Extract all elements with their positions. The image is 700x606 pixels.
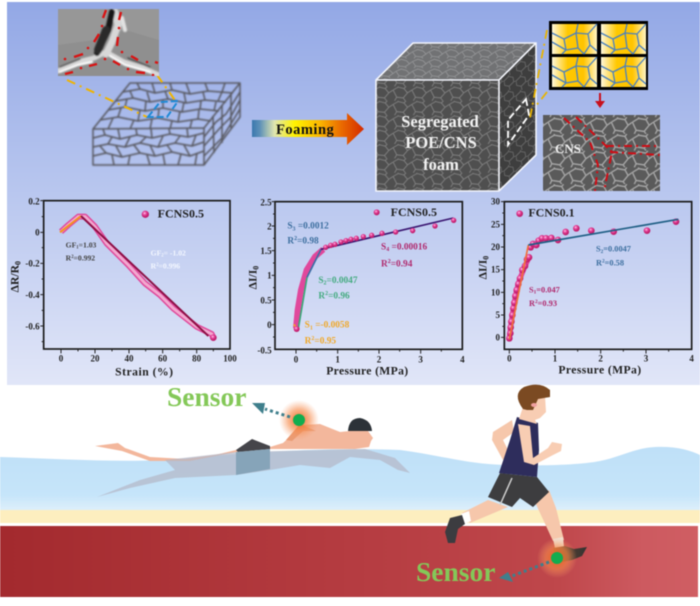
chart: current vs pressure FCNS0.1: R	[529, 299, 535, 308]
SEM micrograph: foam cell junction	[58, 9, 159, 76]
cube label: Segregated	[401, 112, 479, 131]
chart: current vs pressure FCNS0.1: 2	[535, 299, 538, 305]
lower sensor glow	[537, 538, 577, 578]
chart: current vs pressure FCNS0.5: 3	[418, 354, 423, 364]
chart: current vs pressure FCNS0.1: 15	[491, 265, 501, 275]
chart: resistance vs strain: FCNS0.5	[158, 207, 204, 221]
shorts	[488, 473, 549, 507]
hair	[518, 385, 550, 410]
cube label	[401, 112, 479, 174]
chart: current vs pressure FCNS0.5: =-0.0058	[313, 321, 350, 331]
chart: resistance vs strain: -0.2	[25, 259, 40, 269]
chart: resistance vs strain: 40	[125, 353, 134, 363]
upper sensor arrow	[252, 403, 290, 417]
back sock	[461, 511, 471, 524]
chart: current vs pressure FCNS0.1: R	[596, 258, 602, 267]
chart: resistance vs strain: 80	[192, 353, 202, 363]
chart: current vs pressure FCNS0.5: 4	[460, 354, 465, 364]
swimmer arm	[286, 424, 316, 441]
chart: current vs pressure FCNS0.1: S	[596, 245, 601, 254]
chart: current vs pressure FCNS0.5: Pressure (MPa)	[326, 365, 408, 378]
chart: current vs pressure FCNS0.1: =0.047	[536, 285, 560, 294]
lower sensor label: Sensor	[416, 556, 495, 587]
chart: current vs pressure FCNS0.5: =0.00016	[389, 242, 428, 252]
schematic: four segregated-network panels	[549, 21, 648, 90]
neck and face	[519, 396, 546, 424]
runner figure	[445, 385, 587, 563]
foaming arrow: Foaming	[276, 122, 335, 138]
white dashed selection on cube	[508, 99, 529, 145]
chart: current vs pressure FCNS0.1: 4	[689, 354, 694, 364]
chart: current vs pressure FCNS0.1: 1	[534, 290, 537, 296]
chart: resistance vs strain: =0.996	[159, 262, 180, 271]
chart: current vs pressure FCNS0.5: ΔI/I	[246, 270, 259, 289]
chart: resistance vs strain: GF	[66, 240, 76, 249]
chart: resistance vs strain: -0.4	[25, 290, 40, 300]
chart: current vs pressure FCNS0.5: =0.0047	[327, 276, 358, 286]
chart: current vs pressure FCNS0.1: 0	[495, 332, 500, 342]
chart: current vs pressure FCNS0.5: 2	[267, 221, 272, 231]
chart: current vs pressure FCNS0.5: 0	[251, 266, 260, 270]
chart: resistance vs strain: 0.2	[28, 196, 40, 206]
chart: current vs pressure FCNS0.5: S	[381, 242, 386, 252]
front leg	[534, 490, 564, 541]
chart: resistance vs strain	[8, 196, 237, 378]
front shoe	[553, 546, 587, 563]
swimmer cap	[348, 418, 372, 431]
chart: current vs pressure FCNS0.5: 4	[386, 247, 389, 253]
chart: current vs pressure FCNS0.1: 0	[507, 354, 512, 364]
singlet	[499, 417, 539, 477]
chart: current vs pressure FCNS0.5: 1	[267, 271, 272, 281]
chart: current vs pressure FCNS0.5: 2	[377, 354, 382, 364]
chart: current vs pressure FCNS0.5: 2	[311, 336, 314, 342]
chart: current vs pressure FCNS0.5: R	[318, 291, 325, 301]
chart: current vs pressure FCNS0.5: 2.5	[260, 197, 272, 207]
foam block illustration	[93, 83, 240, 165]
front arm	[518, 424, 562, 465]
chart: current vs pressure FCNS0.1: 5	[495, 310, 500, 320]
chart: current vs pressure FCNS0.5: S	[318, 276, 324, 286]
chart: current vs pressure FCNS0.1: 0	[481, 256, 490, 260]
chart: current vs pressure FCNS0.5: S	[287, 222, 293, 232]
chart: current vs pressure FCNS0.1: =0.0047	[603, 245, 631, 254]
upper sensor glow	[279, 400, 319, 440]
chart: current vs pressure FCNS0.1: 25	[491, 219, 501, 229]
chart: current vs pressure FCNS0.5: S	[305, 321, 310, 331]
cheek	[531, 403, 537, 407]
chart: current vs pressure FCNS0.1: 3	[644, 354, 649, 364]
red down arrow	[595, 93, 605, 108]
chart: resistance vs strain: Strain (%)	[115, 365, 174, 378]
CNS label: CNS	[555, 141, 581, 156]
chart: resistance vs strain: 20	[91, 353, 100, 363]
chart: resistance vs strain: 0	[13, 261, 22, 265]
chart: current vs pressure FCNS0.1: 1	[553, 354, 558, 364]
chart: resistance vs strain: 2	[156, 263, 159, 268]
chart: current vs pressure FCNS0.5: 2	[388, 259, 391, 265]
chart: resistance vs strain: = -1.02	[164, 249, 186, 258]
yellow dashed zoom lines from foam to micrograph	[67, 75, 177, 117]
chart: current vs pressure FCNS0.5: 0.5	[260, 295, 272, 305]
blue dashed selection on foam	[148, 101, 178, 117]
chart: current vs pressure FCNS0.5: 1	[335, 354, 340, 364]
yellow dashed lines to schematic	[530, 30, 547, 118]
chart: current vs pressure FCNS0.5: 1	[310, 325, 313, 331]
chart: resistance vs strain: 2	[71, 255, 74, 260]
chart: current vs pressure FCNS0.5: =0.98	[297, 236, 319, 246]
chart: current vs pressure FCNS0.1: Pressure (MPa)	[558, 363, 642, 376]
upper sensor label: Sensor	[167, 381, 246, 412]
back arm	[492, 420, 514, 460]
chart: current vs pressure FCNS0.5: R	[305, 336, 311, 346]
chart: current vs pressure FCNS0.1: =0.93	[538, 299, 557, 308]
chart: current vs pressure FCNS0.1: 2	[598, 354, 603, 364]
upper sensor dot	[293, 414, 305, 426]
chart: current vs pressure FCNS0.5: =0.94	[391, 259, 413, 269]
chart: current vs pressure FCNS0.5: 0	[294, 354, 299, 364]
chart: current vs pressure FCNS0.1: FCNS0.1	[528, 206, 575, 220]
chart: resistance vs strain: -0.6	[25, 321, 40, 331]
chart: resistance vs strain: 0	[35, 228, 40, 238]
chart: current vs pressure FCNS0.5: 1.5	[260, 246, 272, 256]
segregated foam cube	[376, 43, 536, 191]
chart: resistance vs strain: 0	[59, 353, 64, 363]
back shoe	[445, 515, 465, 543]
chart: current vs pressure FCNS0.1: ΔI/I	[476, 260, 489, 279]
swimmer figure	[95, 418, 410, 497]
chart: resistance vs strain: 100	[223, 353, 237, 363]
chart: current vs pressure FCNS0.1: =0.58	[605, 258, 624, 267]
chart: current vs pressure FCNS0.5: R	[381, 259, 388, 269]
chart: current vs pressure FCNS0.1: 10	[491, 287, 501, 297]
chart: current vs pressure FCNS0.5: -0.5	[257, 345, 272, 355]
chart: current vs pressure FCNS0.5: 3	[293, 226, 296, 232]
foaming arrow	[252, 113, 364, 145]
chart: resistance vs strain: 1	[76, 245, 79, 250]
swimmer body	[95, 424, 373, 461]
chart: current vs pressure FCNS0.1: 2	[601, 249, 604, 255]
chart: current vs pressure FCNS0.5: =0.96	[328, 291, 350, 301]
lower scene background	[0, 386, 700, 606]
upper panel background	[7, 2, 700, 385]
chart: current vs pressure FCNS0.5	[246, 197, 465, 378]
chart: current vs pressure FCNS0.1: 2	[602, 258, 605, 264]
chart: current vs pressure FCNS0.5: R	[287, 236, 294, 246]
chart: current vs pressure FCNS0.5: =0.95	[314, 336, 336, 346]
chart: resistance vs strain: =0.992	[74, 254, 95, 263]
chart: current vs pressure FCNS0.1: 20	[491, 242, 501, 252]
submerged body	[97, 449, 410, 497]
chart: resistance vs strain: 2	[161, 254, 164, 259]
chart: current vs pressure FCNS0.5: =0.0012	[296, 222, 329, 232]
lower sensor arrow	[499, 562, 549, 582]
chart: resistance vs strain: GF	[151, 249, 161, 258]
cube label: POE/CNS	[405, 133, 477, 152]
running track	[0, 526, 698, 597]
front sock	[553, 537, 564, 548]
chart: current vs pressure FCNS0.5: 2	[324, 281, 327, 287]
chart: current vs pressure FCNS0.5: FCNS0.5	[391, 205, 437, 219]
chart: current vs pressure FCNS0.1: S	[529, 285, 534, 294]
chart: current vs pressure FCNS0.5: 0	[267, 320, 272, 330]
chart: resistance vs strain: ΔR/R	[8, 265, 21, 292]
chart: resistance vs strain: R	[66, 254, 71, 263]
swimmer shorts	[236, 439, 270, 452]
chart: current vs pressure FCNS0.1	[476, 197, 694, 376]
chart: current vs pressure FCNS0.5: 2	[325, 291, 328, 297]
submerged shorts	[236, 449, 270, 475]
back leg	[462, 500, 508, 523]
chart: current vs pressure FCNS0.1: 30	[491, 197, 501, 207]
chart: current vs pressure FCNS0.5: 2	[294, 236, 297, 242]
cube label: foam	[423, 155, 459, 174]
chart: resistance vs strain: =1.03	[79, 240, 97, 249]
chart: resistance vs strain: R	[151, 262, 156, 271]
SEM micrograph: CNS network	[543, 115, 660, 191]
lower sensor dot	[551, 552, 563, 564]
chart: resistance vs strain: 60	[158, 353, 168, 363]
